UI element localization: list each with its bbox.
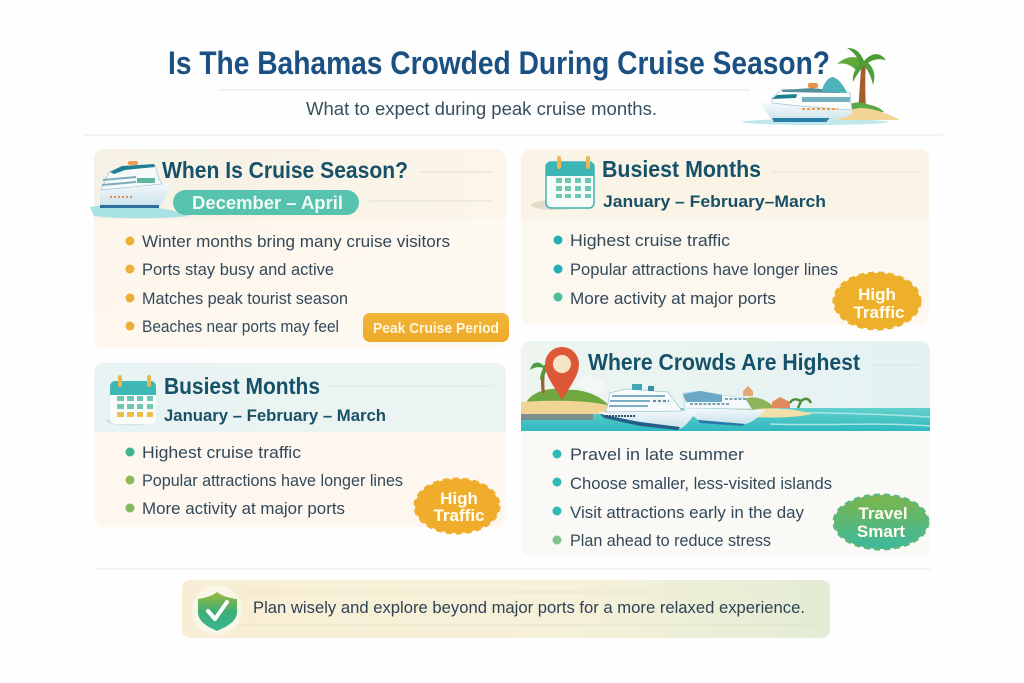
- date range: January – February – March: [164, 406, 386, 425]
- icon: calendar: [531, 156, 594, 210]
- bullet list: Popular attractions have longer lines: [142, 471, 403, 490]
- bullet list: Visit attractions early in the day: [570, 503, 804, 522]
- bullet list: [126, 443, 403, 518]
- heading: Busiest Months: [602, 156, 761, 182]
- bullet list: Highest cruise traffic: [570, 231, 731, 250]
- bullet list: More activity at major ports: [570, 289, 776, 308]
- badge: high traffic: High: [440, 489, 478, 508]
- badge: high traffic: Traffic: [433, 506, 485, 525]
- badge: travel smart: Smart: [857, 522, 905, 541]
- bullet list: [552, 445, 832, 550]
- bullet list: Beaches near ports may feel: [142, 317, 339, 336]
- bullet list: More activity at major ports: [142, 499, 345, 518]
- badge: travel smart: Travel: [858, 504, 908, 523]
- icon: cruise ship and palm island: [742, 48, 900, 125]
- bullet list: Pravel in late summer: [570, 445, 744, 464]
- panel: where crowds are highest: [521, 341, 930, 556]
- second ship: [683, 391, 765, 426]
- badge: high traffic: High: [858, 285, 896, 304]
- badge: peak cruise period: [363, 313, 509, 342]
- badge: high traffic: [834, 273, 920, 329]
- date pill: December – April: [192, 193, 343, 213]
- icon: location pin: [545, 347, 579, 400]
- footer banner: [182, 580, 830, 638]
- panel: busiest months left: [94, 363, 506, 533]
- icon: shield check: [192, 585, 242, 635]
- bullet list: Ports stay busy and active: [142, 260, 334, 279]
- bullet list: Matches peak tourist season: [142, 289, 348, 308]
- first ship: [598, 384, 698, 430]
- panel: when is cruise season: [90, 149, 509, 348]
- heading: Busiest Months: [164, 373, 320, 399]
- date pill: [173, 190, 359, 215]
- bullet list: [554, 231, 838, 308]
- panel: busiest months right: [521, 149, 929, 329]
- title: Is The Bahamas Crowded During Cruise Season?: [168, 45, 830, 81]
- bullet list: Winter months bring many cruise visitors: [142, 232, 450, 251]
- badge: high traffic: [415, 479, 499, 533]
- badge: high traffic: Traffic: [853, 303, 905, 322]
- heading: When Is Cruise Season?: [162, 157, 408, 183]
- bullet list: Choose smaller, less-visited islands: [570, 474, 832, 493]
- badge: travel smart: [834, 495, 928, 549]
- badge: peak cruise period: Peak Cruise Period: [373, 320, 499, 337]
- bullet list: Popular attractions have longer lines: [570, 260, 838, 279]
- bullet list: [126, 232, 450, 336]
- date range: January – February–March: [603, 192, 826, 211]
- heading: Where Crowds Are Highest: [588, 349, 860, 375]
- footer text: Plan wisely and explore beyond major ports for a more relaxed experience.: [253, 598, 805, 617]
- bullet list: Highest cruise traffic: [142, 443, 302, 462]
- icon: calendar: [106, 375, 156, 426]
- bullet list: Plan ahead to reduce stress: [570, 531, 771, 550]
- harbor scene: [521, 347, 930, 431]
- subtitle: What to expect during peak cruise months.: [306, 98, 657, 119]
- icon: ship: [90, 161, 190, 218]
